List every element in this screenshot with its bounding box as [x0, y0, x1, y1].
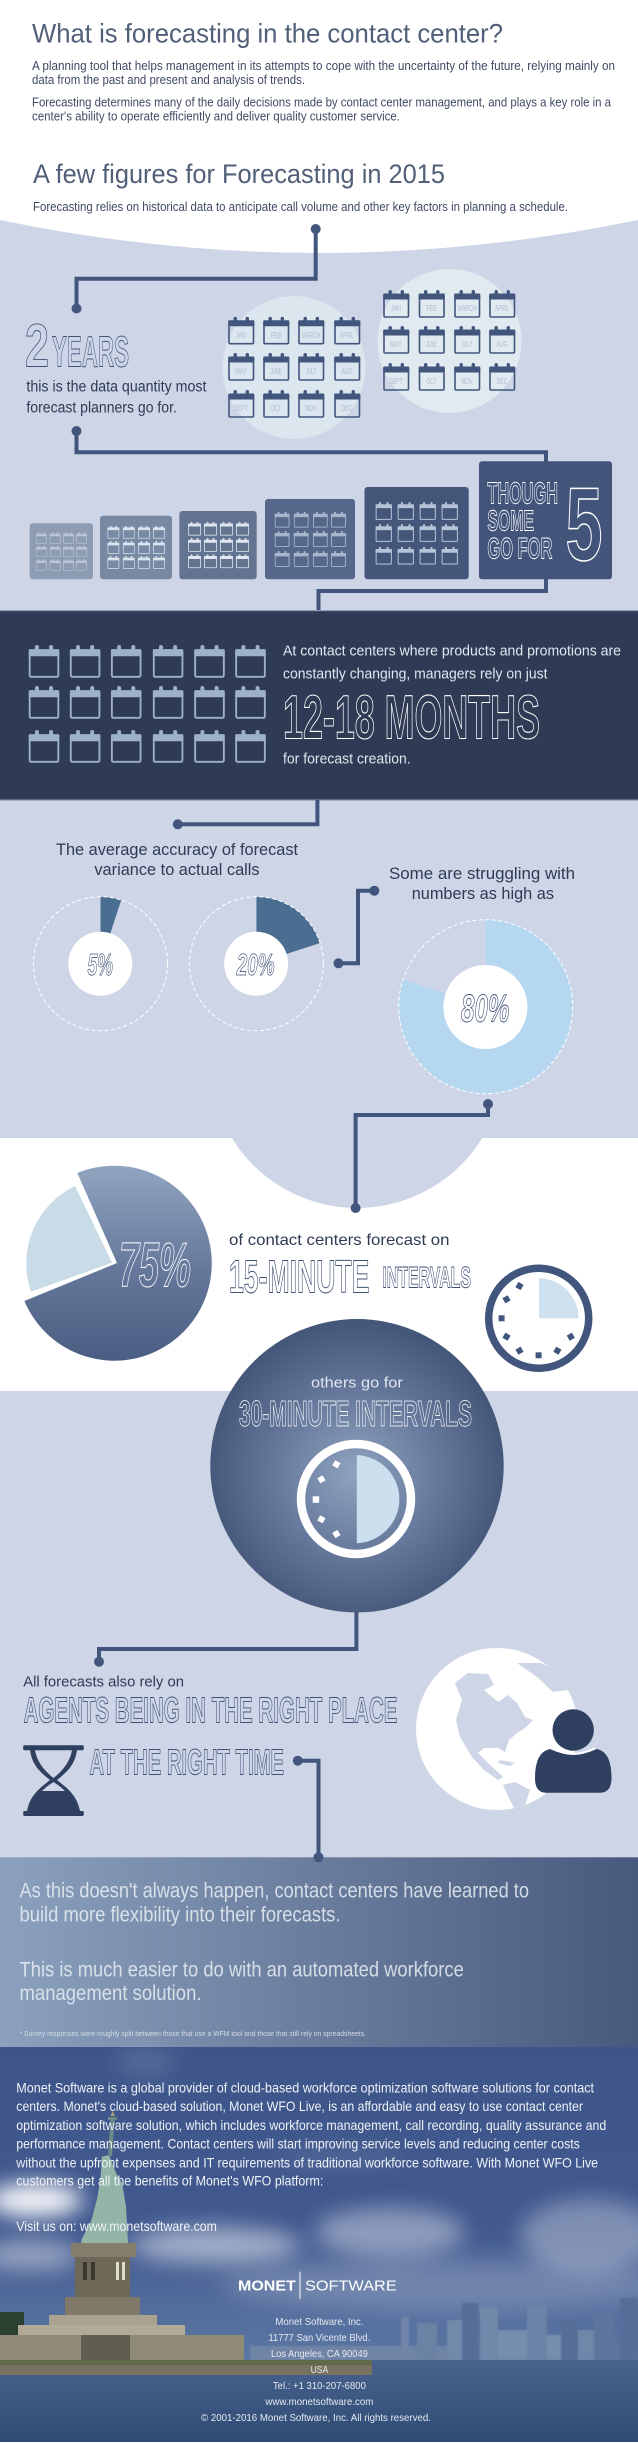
clouds — [0, 2046, 638, 2311]
text: others go for: others go for — [311, 1375, 403, 1392]
heading: average accuracy — [56, 841, 298, 879]
box 4 — [265, 499, 355, 579]
text: company description: customers get all the benefits of Monet's WFO platform: — [16, 2172, 323, 2188]
connector: 80% to 75% section — [351, 1099, 493, 1213]
intro paragraphs — [32, 58, 615, 124]
donut chart: 80%: 80% — [461, 988, 509, 1031]
donut chart: 20% — [189, 897, 323, 1031]
stat: 15-minute intervals: INTERVALS — [382, 1262, 471, 1295]
icon group: year one calendars: MARCH — [302, 330, 320, 340]
stat: 2 years — [25, 312, 129, 380]
lavender lower panel — [0, 1391, 638, 1858]
title: What is forecasting in the contact center? — [32, 19, 503, 49]
logo: Monet Software: SOFTWARE — [305, 2278, 397, 2295]
text: build more flexibility — [20, 1878, 529, 1927]
icon group: year two calendars: NOV — [462, 376, 473, 386]
box 2 — [100, 516, 172, 579]
stat: 30-minute intervals: 30-MINUTE INTERVALS — [239, 1393, 472, 1434]
water — [0, 2360, 638, 2442]
text: company address: Tel.: +1 310-207-6800 — [273, 2380, 366, 2392]
text: visit us: Visit us on: www.monetsoftware.com — [16, 2218, 217, 2234]
intro paragraphs: center's ability to operate efficiently and deliver quality customer service. — [32, 109, 400, 124]
icon group: year two calendars: OCT — [426, 376, 436, 386]
subheading: Forecasting relies on historical data to anticipate call volume and other key factors in planning a schedule. — [33, 199, 568, 214]
statue of liberty — [65, 2111, 140, 2315]
donut chart: 5%: 5% — [88, 947, 113, 982]
text: company address: www.monetsoftware.com — [264, 2396, 374, 2408]
box 6: though some go for 5 — [479, 461, 612, 583]
panel: company footer photo — [0, 2046, 638, 2442]
text: company description — [15, 2079, 606, 2188]
icon group: year two calendars: SEPT — [390, 376, 402, 386]
icon group: year one calendars: AUG — [342, 366, 352, 376]
connector: five years to dark band — [318, 579, 546, 611]
heading: average accuracy: variance to actual calls — [94, 861, 260, 879]
text: forecast creation: for forecast creation. — [283, 750, 411, 767]
connector: band to accuracy heading — [173, 800, 317, 829]
icon group: year two calendars: DEC — [496, 376, 508, 386]
box 6: though some go for 5: THOUGH — [487, 475, 558, 510]
connector: two years to five years — [72, 426, 546, 462]
donut chart: 80% — [399, 920, 573, 1094]
connector: intro to two years — [72, 224, 321, 314]
connector end dot — [314, 1852, 324, 1862]
text: data quantity: forecast planners go for. — [26, 400, 177, 417]
panel: 30-minute intervals circle — [210, 1319, 504, 1612]
text: some are struggling: Some are struggling with — [389, 865, 575, 883]
intro paragraphs: data from the past and present and analysis of trends. — [32, 72, 305, 87]
icon group: year one calendars: SEPT — [234, 403, 248, 413]
box 3 — [179, 511, 257, 579]
text: company address: 11777 San Vicente Blvd. — [269, 2332, 370, 2344]
box 1 — [30, 523, 93, 579]
lavender background with curved top — [0, 220, 638, 1138]
icon group: year two calendars: MAY — [390, 339, 402, 349]
text: company address: USA — [311, 2364, 328, 2376]
stat: 15-minute intervals: 15-MINUTE — [229, 1251, 369, 1303]
icon: clock half — [301, 1444, 411, 1554]
text: data quantity — [26, 379, 207, 417]
panel: flexibility message — [0, 1852, 638, 2047]
growing boxes of calendars — [30, 461, 612, 583]
text: automated solution: management solution. — [20, 1981, 202, 2005]
icon group: year two calendars: APRIL — [495, 303, 509, 313]
connector: 30-minute to agents — [94, 1612, 356, 1667]
icon grid: eighteen calendars — [29, 645, 266, 762]
text: automated solution: This is much easier to do with an automated workforce — [20, 1958, 464, 1982]
text: data quantity: this is the data quantity most — [26, 379, 207, 396]
icon group: year one calendars: JAN — [236, 330, 246, 340]
text: some are struggling — [389, 865, 575, 903]
pie chart: 75% — [24, 1166, 212, 1361]
text: contact centers: At contact centers where products and promotions are — [283, 643, 621, 660]
icon group: year one calendars: OCT — [271, 403, 281, 413]
box 5 — [364, 487, 469, 579]
box 6: though some go for 5: 5 — [566, 467, 602, 583]
city skyline — [250, 2298, 638, 2360]
heading: figures for 2015: A few figures for Forecasting in 2015 — [33, 159, 445, 189]
icon: clock quarter — [489, 1268, 589, 1368]
text: company address: Los Angeles, CA 90049 — [271, 2348, 368, 2360]
icon group: year one calendars: APRIL — [340, 330, 354, 340]
box 6: though some go for 5: SOME — [487, 506, 534, 538]
logo: Monet Software — [238, 2272, 397, 2299]
stat: 2 years: YEARS — [52, 328, 129, 377]
text: build more flexibility: build more flexibility into their forecasts. — [20, 1903, 340, 1927]
text: automated solution — [20, 1958, 464, 2005]
footnote: * Survey responses were roughly split between those that use a WFM tool and those that still rely on spreadsheets. — [20, 2029, 366, 2038]
pie chart: 75%: 75% — [119, 1231, 191, 1301]
island — [0, 2312, 372, 2375]
connector: 20% to struggling text — [334, 886, 379, 968]
text: contact centers: constantly changing, managers rely on just — [283, 665, 548, 682]
icon group: year two calendars: JAN — [391, 303, 401, 313]
text: build more flexibility: As this doesn't always happen, contact centers have learned to — [20, 1878, 529, 1902]
icon group: year one calendars: NOV — [306, 403, 317, 413]
icon: hourglass — [23, 1745, 84, 1816]
curved bump below lavender panel — [210, 914, 504, 1208]
icon group: year one calendars: JUNE — [270, 366, 282, 376]
text: company address — [201, 2316, 431, 2424]
panel: 12-18 months — [0, 610, 638, 801]
text: company address: © 2001-2016 Monet Software, Inc. All rights reserved. — [201, 2412, 431, 2424]
heading: average accuracy: The average accuracy of forecast — [56, 841, 298, 859]
text: contact centers forecast on: of contact centers forecast on — [229, 1232, 450, 1249]
icon group: year two calendars: JULY — [462, 339, 473, 349]
icon group: year two calendars: MARCH — [458, 303, 476, 313]
donut chart: 5% — [34, 897, 168, 1031]
icon group: year two calendars: FEB — [426, 303, 437, 313]
text: all forecasts rely on: All forecasts also rely on — [23, 1674, 184, 1691]
text: company address: Monet Software, Inc. — [275, 2316, 363, 2328]
donut chart: 20%: 20% — [236, 947, 275, 982]
text: contact centers — [283, 643, 621, 682]
connector: right time to flexibility band — [293, 1756, 318, 1857]
icon group: year one calendars: DEC — [342, 403, 352, 413]
icon group: year two calendars: JUNE — [426, 339, 437, 349]
icon group: year two calendars — [378, 269, 522, 413]
icon group: year one calendars: FEB — [271, 330, 281, 340]
icon group: year one calendars: JULY — [306, 366, 317, 376]
icon: globe with agent — [416, 1648, 612, 1810]
box 6: though some go for 5: GO FOR — [487, 532, 553, 565]
icon group: year two calendars: AUG — [496, 339, 508, 349]
logo: Monet Software: MONET — [238, 2278, 296, 2295]
icon group: year one calendars — [222, 296, 366, 439]
stat: 2 years: 2 — [25, 312, 49, 380]
heading: at the right time: AT THE RIGHT TIME — [90, 1741, 284, 1782]
text: some are struggling: numbers as high as — [412, 885, 554, 903]
icon group: year one calendars: MAY — [235, 366, 247, 376]
